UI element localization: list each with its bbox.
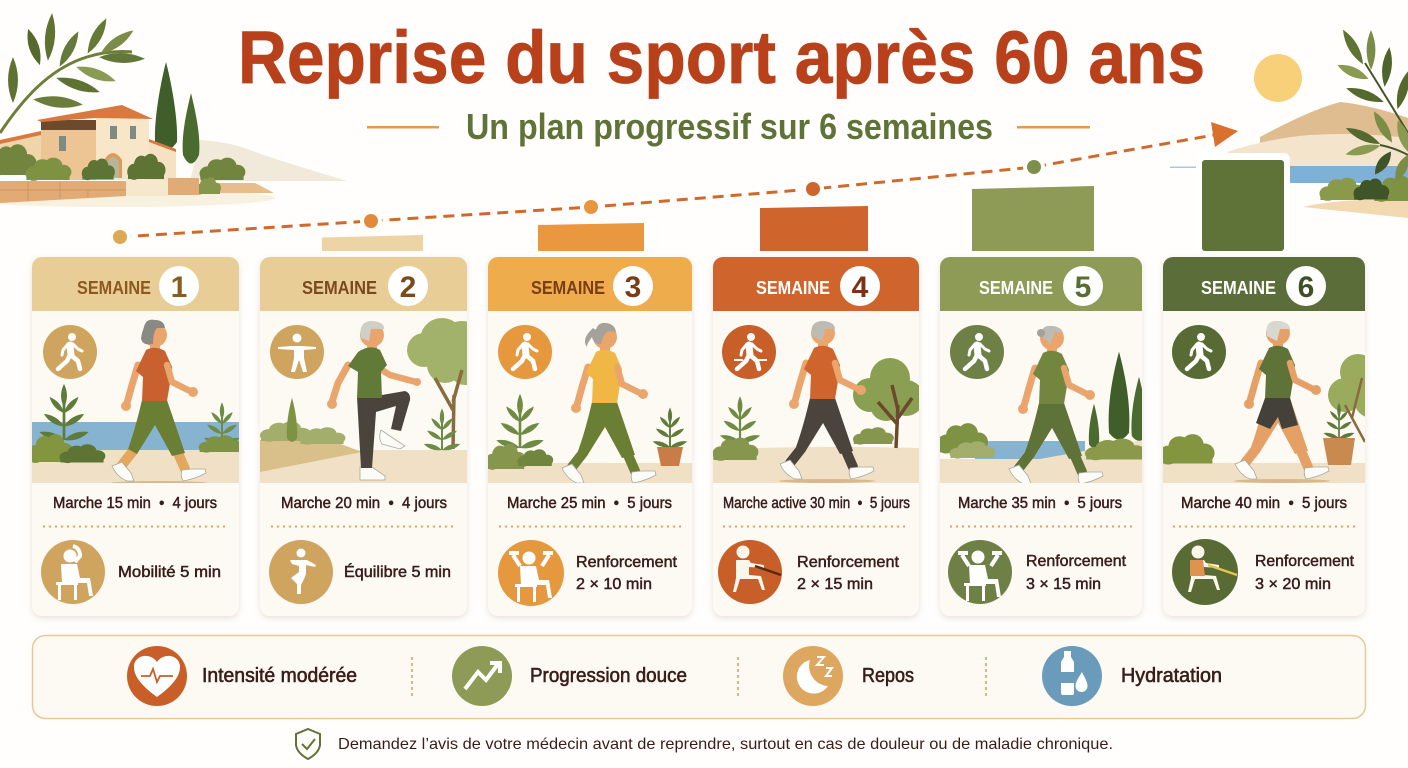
- subtitle with side rules: Un plan progressif sur 6 semaines: [466, 106, 993, 147]
- icon: walking: [950, 325, 1004, 379]
- bushes: [1320, 176, 1408, 202]
- shorts: [1256, 398, 1298, 429]
- icon: walking: [1172, 325, 1226, 379]
- exercise text: 3 × 20 min: [1255, 576, 1331, 593]
- icon: heart: [127, 646, 187, 706]
- icon: seated resistance band: [718, 540, 782, 604]
- stone wall: [0, 178, 199, 203]
- olive branch: [1336, 27, 1408, 184]
- cypress trees: [155, 62, 199, 164]
- scene: garden walk: [485, 323, 692, 487]
- illustration: Mediterranean house at top left: [0, 13, 347, 207]
- exercise text: Équilibre 5 min: [344, 562, 451, 581]
- header: [260, 257, 467, 311]
- exercise text: [1026, 553, 1127, 593]
- sun: [1254, 54, 1302, 102]
- hills: [1227, 102, 1408, 170]
- sea: [1170, 166, 1408, 183]
- icon: seated dumbbells: [948, 540, 1012, 604]
- title: Reprise du sport après 60 ans: [238, 16, 1205, 99]
- label: Repos: [862, 665, 914, 687]
- walk text: Marche 35 min • 5 jours: [958, 495, 1122, 512]
- icon: walking: [498, 325, 552, 379]
- header: SEMAINE: [756, 278, 830, 298]
- icon: standing on one leg: [269, 540, 333, 604]
- icon: shield check: [296, 729, 320, 759]
- walk text: Marche 20 min • 4 jours: [281, 495, 447, 512]
- walk text: Marche 25 min • 5 jours: [507, 495, 672, 512]
- exercise text: Renforcement: [1255, 553, 1355, 570]
- header: SEMAINE: [531, 278, 605, 298]
- header: [713, 257, 919, 311]
- header: 2: [400, 271, 416, 304]
- icon: moon and zz: [783, 646, 843, 706]
- icon: water bottle: [1042, 646, 1102, 706]
- exercise text: 3 × 15 min: [1026, 576, 1101, 593]
- exercise text: [576, 554, 678, 593]
- walk text: Marche active 30 min • 5 jours: [723, 495, 910, 512]
- card: semaine 4: [712, 257, 924, 616]
- olive branch: [0, 13, 145, 133]
- icon: seated resistance band: [1172, 539, 1238, 605]
- scene: brisk walk with olive tree: [712, 321, 924, 483]
- icon: seated dumbbells: [498, 540, 564, 606]
- walk text: Marche 40 min • 5 jours: [1181, 495, 1347, 512]
- exercise text: 2 × 15 min: [797, 576, 873, 593]
- bushes: [0, 144, 245, 195]
- house: [0, 105, 176, 180]
- icon: fast walking: [722, 325, 776, 379]
- header: 3: [625, 271, 641, 304]
- card: semaine 5: [937, 257, 1147, 616]
- illustration: sun, hills and sea at top right: [1170, 27, 1408, 218]
- header: 6: [1298, 271, 1314, 304]
- label: Hydratation: [1121, 665, 1222, 687]
- scene: cypress and sea: [937, 326, 1147, 488]
- exercise text: Renforcement: [1026, 553, 1127, 570]
- card: semaine 6: [1161, 257, 1367, 620]
- header: SEMAINE: [77, 278, 151, 298]
- exercise text: Renforcement: [797, 554, 900, 571]
- header: 4: [852, 271, 869, 304]
- header: SEMAINE: [302, 278, 377, 298]
- header: [1163, 257, 1365, 311]
- exercise text: Renforcement: [576, 554, 678, 571]
- beach: [1303, 200, 1408, 218]
- scene: walk with pot and tree: [1163, 321, 1365, 483]
- exercise text: 2 × 10 min: [576, 576, 652, 593]
- panel: legend tips: [32, 636, 1366, 718]
- footer note: [296, 729, 1113, 759]
- header: 5: [1075, 271, 1091, 304]
- header: [940, 257, 1142, 311]
- scene: balance in a garden: [260, 318, 486, 483]
- icon: rising arrow: [452, 646, 512, 706]
- label: Intensité modérée: [202, 665, 357, 687]
- header: [32, 257, 239, 311]
- progress bars above cards: [322, 153, 1290, 253]
- label: Progression douce: [530, 665, 687, 687]
- header: SEMAINE: [979, 278, 1053, 298]
- exercise text: [1255, 553, 1355, 593]
- exercise text: Mobilité 5 min: [118, 564, 221, 581]
- header: SEMAINE: [1201, 278, 1276, 298]
- header: [488, 257, 692, 311]
- card: semaine 3: [485, 257, 692, 616]
- scene: seaside walk: [28, 320, 242, 485]
- icon: balance figure: [270, 325, 324, 379]
- header: 1: [171, 271, 187, 304]
- exercise text: [797, 554, 900, 593]
- card: semaine 1: [28, 257, 242, 616]
- icon: walking: [43, 325, 97, 379]
- walk text: Marche 15 min • 4 jours: [53, 495, 217, 512]
- footer note: Demandez l’avis de votre médecin avant de reprendre, surtout en cas de douleur ou de maladie chronique.: [338, 736, 1113, 753]
- icon: seated mobility: [41, 540, 105, 604]
- rising dashed trend arrow: [113, 122, 1238, 244]
- card: semaine 2: [260, 257, 486, 616]
